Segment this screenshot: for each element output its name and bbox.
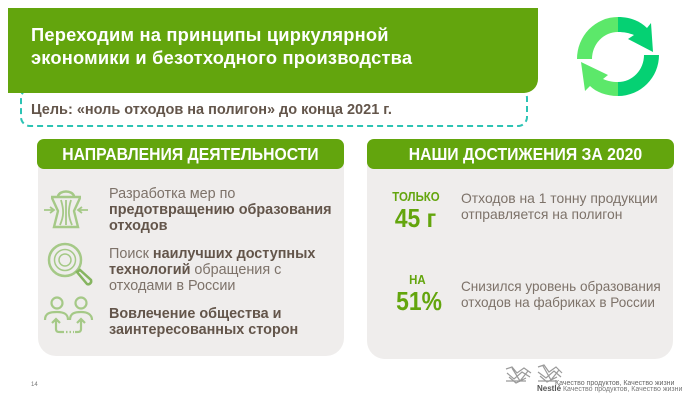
text: engagement [109,306,298,338]
header banner [8,8,538,93]
panel: directions [38,146,344,356]
stat label: only: ТОЛЬКО [392,189,440,204]
text: technologies: Поиск наилучших доступных [109,246,315,262]
text: engagement: заинтересованных сторон [109,322,298,338]
stat value: 51%: 51% [396,286,442,316]
footer logo and tagline [506,364,682,393]
icon: nest logos [506,364,562,384]
title: Переходим на принципы циркулярной [31,24,389,45]
title: экономики и безотходного производства [31,47,412,68]
text: prevention: Разработка мер по [109,186,235,202]
title [31,24,412,68]
stat text: reduction: Снизился уровень образования [461,279,661,294]
stat text: reduction: отходов на фабриках в России [461,294,655,310]
goal text: Цель: «ноль отходов на полигон» до конца 2021 г. [31,102,392,118]
stat text: per tonne [461,190,658,222]
text: prevention: предотвращению образования [109,202,332,218]
icon: magnifier [48,242,92,286]
page number: 14 [31,382,38,388]
panel: achievements [367,146,673,359]
stat text: reduction [461,279,661,310]
stat label: by: НА [409,272,425,287]
text: technologies: отходами в России [109,278,235,294]
text: prevention: отходов [109,218,168,234]
heading: directions: НАПРАВЛЕНИЯ ДЕЯТЕЛЬНОСТИ [62,144,319,164]
stat value: 45 g: 45 г [394,203,436,233]
heading: achievements [367,139,674,169]
stat text: per tonne: отправляется на полигон [461,206,622,222]
goal box [20,88,528,127]
icon: recycle arrows [577,17,659,96]
icon: people [44,296,94,334]
text: technologies [109,246,316,294]
stat text: per tonne: Отходов на 1 тонну продукции [461,190,658,206]
heading: directions [37,139,344,169]
brand and tagline bottom: Nestlé Качество продуктов, Качество жизни [537,384,682,393]
tagline top: Качество продуктов, Качество жизни [555,380,674,387]
icon: compressed bin [44,190,88,228]
text: prevention [109,186,332,234]
text: technologies: технологий обращения с [109,262,281,278]
text: engagement: Вовлечение общества и [109,306,282,322]
heading: achievements: НАШИ ДОСТИЖЕНИЯ ЗА 2020 [409,144,642,164]
